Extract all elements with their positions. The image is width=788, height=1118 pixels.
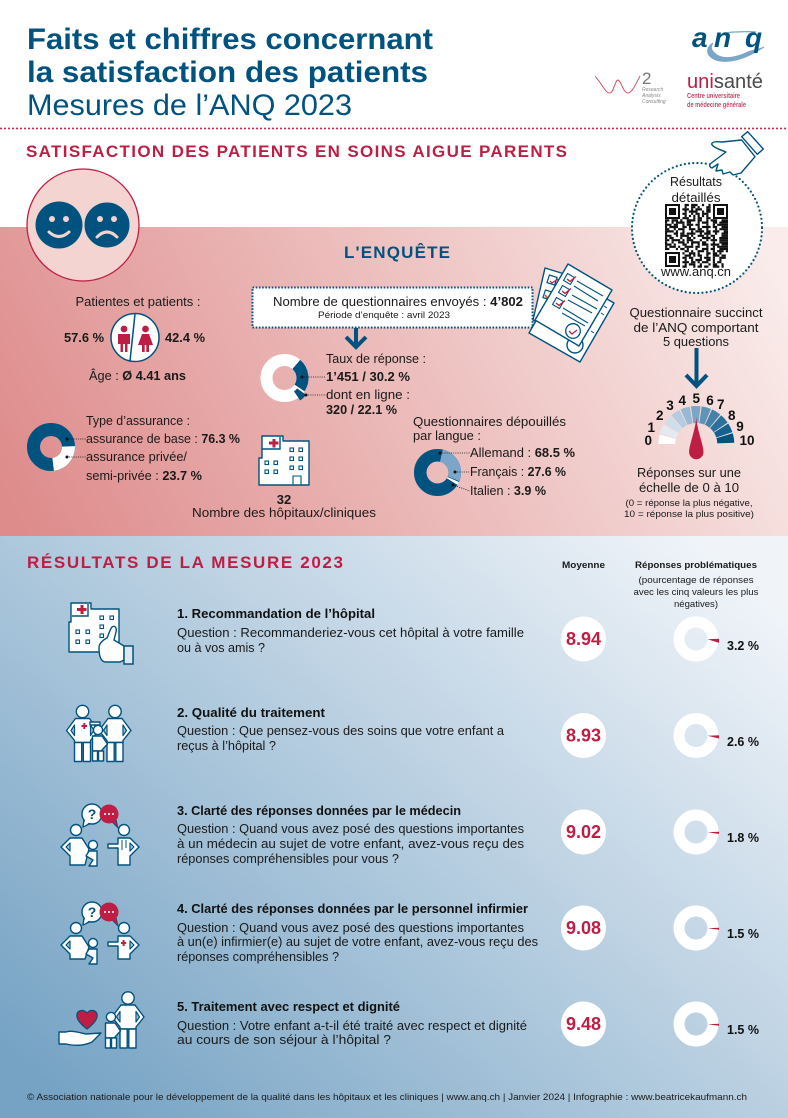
average score xyxy=(561,1002,606,1046)
response rate labels xyxy=(326,351,426,417)
average score: 8.94 xyxy=(566,629,601,649)
column head: average: Moyenne xyxy=(562,560,605,570)
problem share donut: 2.6 % xyxy=(727,735,759,749)
scale caption xyxy=(624,465,754,519)
gauge numbers: 2 xyxy=(656,408,663,423)
gender split: Patientes et patients : xyxy=(75,294,201,309)
gender split: Âge : Ø 4.41 ans xyxy=(89,368,186,383)
logo: W2: Research xyxy=(642,87,664,93)
logo: W2: 2 xyxy=(642,69,651,88)
logo: anq: n xyxy=(714,22,731,53)
gauge numbers: 1 xyxy=(648,420,656,435)
gauge numbers: 9 xyxy=(736,419,744,434)
gender split: 42.4 % xyxy=(165,330,205,345)
gauge numbers: 10 xyxy=(739,433,755,448)
title: la satisfaction des patients xyxy=(27,56,428,89)
gender split: 57.6 % xyxy=(64,330,104,345)
row 3: doctor answers: réponses compréhensibles pour vous ? xyxy=(177,852,399,866)
insurance labels: assurance de base : 76.3 % xyxy=(86,431,240,446)
scale caption: échelle de 0 à 10 xyxy=(639,480,739,495)
background: survey band xyxy=(0,227,788,536)
column head: problematic answers: avec les cinq valeurs les plus xyxy=(634,587,759,597)
logo: anq xyxy=(692,22,764,61)
problem share donut: 1.5 % xyxy=(727,927,759,941)
QR panel: détaillés xyxy=(672,190,721,205)
row 4: nurse answers: réponses compréhensibles ? xyxy=(177,950,339,964)
icon: questionnaire sheets xyxy=(529,264,614,362)
average score: 9.48 xyxy=(566,1014,601,1034)
logo: anq: a xyxy=(692,22,708,53)
insurance labels: assurance privée/ xyxy=(86,449,187,464)
language labels: Allemand : 68.5 % xyxy=(470,445,575,460)
row 3: doctor answers: 3. Clarté des réponses données par le médecin xyxy=(177,804,461,818)
row 4: nurse answers xyxy=(61,902,759,964)
problem share donut: 1.5 % xyxy=(727,1023,759,1037)
language labels: Français : 27.6 % xyxy=(470,464,566,479)
QR panel: www.anq.cn xyxy=(660,264,731,279)
row 3: doctor answers: à un médecin au sujet de votre enfant, avez-vous reçu des xyxy=(177,837,524,851)
chart: response rate donut xyxy=(259,353,326,406)
column head: problematic answers: (pourcentage de réponses xyxy=(638,575,754,585)
row 4: nurse answers: à un(e) infirmier(e) au sujet de votre enfant, avez-vous reçu des xyxy=(177,935,538,949)
row 5: respect and dignity: Question : Votre enfant a-t-il été traité avec respect et dignité xyxy=(177,1019,527,1033)
language labels xyxy=(470,445,575,498)
average score: 9.02 xyxy=(566,822,601,842)
language heading: Questionnaires dépouillés xyxy=(413,414,566,429)
hospitals count: 32 xyxy=(277,492,291,507)
icon: doctor conversation: ? xyxy=(88,806,96,822)
response rate labels: 1’451 / 30.2 % xyxy=(326,369,410,384)
QR panel xyxy=(632,163,762,293)
questionnaire text: Questionnaire succinct xyxy=(630,305,763,320)
problem share donut xyxy=(679,1007,759,1041)
language heading xyxy=(413,414,566,443)
icon: nurse conversation xyxy=(61,902,139,964)
problem share donut xyxy=(679,622,759,656)
problem share donut xyxy=(679,718,759,752)
chart: scale gauge xyxy=(655,402,738,486)
average score xyxy=(561,616,606,662)
questionnaire text: 5 questions xyxy=(663,334,729,349)
column head: problematic answers: Réponses problématiques xyxy=(635,560,757,570)
gauge numbers: 4 xyxy=(679,393,687,408)
hospitals count xyxy=(192,492,377,520)
problem share donut xyxy=(679,815,759,849)
row 3: doctor answers xyxy=(61,804,759,866)
icon: hospital with thumb xyxy=(69,603,133,664)
gender split xyxy=(64,294,205,383)
row 2: treatment quality xyxy=(66,705,759,762)
logo: unisanté: unisanté xyxy=(687,71,763,93)
language labels: Italien : 3.9 % xyxy=(470,483,546,498)
average score xyxy=(561,810,606,854)
response rate labels: Taux de réponse : xyxy=(326,351,426,366)
logo: W2: Analysis xyxy=(641,93,661,99)
gauge needle xyxy=(689,417,704,459)
icon: family and caregiver xyxy=(66,705,131,762)
row 2: treatment quality: Question : Que pensez-vous des soins que votre enfant a xyxy=(177,724,504,738)
questionnaire text xyxy=(630,305,763,349)
row 1: recommendation: 1. Recommandation de l’hôpital xyxy=(177,607,375,621)
heading: satisfaction: SATISFACTION DES PATIENTS EN SOINS AIGUE PARENTS xyxy=(26,142,567,161)
icon: pointing hand xyxy=(710,132,763,175)
column head: problematic answers: négatives) xyxy=(674,599,718,609)
row 1: recommendation: ou à vos amis ? xyxy=(177,641,265,655)
logo: anq: q xyxy=(745,22,762,53)
row 2: treatment quality: 2. Qualité du traitement xyxy=(177,706,326,720)
logo: W2 xyxy=(595,69,666,105)
gauge numbers: 3 xyxy=(666,398,674,413)
icon: nurse conversation: ? xyxy=(88,904,96,920)
title: Mesures de l’ANQ 2023 xyxy=(27,89,352,122)
insurance labels: semi-privée : 23.7 % xyxy=(86,468,202,483)
hospitals count: Nombre des hôpitaux/cliniques xyxy=(192,505,377,520)
logo: unisanté: Centre universitaire xyxy=(687,93,740,100)
logo: W2: Consulting xyxy=(642,99,666,105)
gauge numbers: 6 xyxy=(706,393,714,408)
logo: unisanté xyxy=(687,71,763,109)
icon: smiley faces xyxy=(27,169,139,281)
chart: insurance donut xyxy=(33,429,86,465)
scale caption: 10 = réponse la plus positive) xyxy=(624,509,754,519)
icon: heart in hand with family xyxy=(59,992,144,1048)
language heading: par langue : xyxy=(413,428,481,443)
scale caption: Réponses sur une xyxy=(637,465,741,480)
logo: unisanté: de médecine générale xyxy=(687,102,746,109)
insurance labels xyxy=(86,413,240,483)
problem share donut: 3.2 % xyxy=(727,639,759,653)
heading: survey: L'ENQUÊTE xyxy=(344,243,450,262)
column head: problematic answers xyxy=(634,560,759,609)
icon: doctor conversation xyxy=(61,804,139,866)
row 5: respect and dignity: 5. Traitement avec respect et dignité xyxy=(177,1000,400,1014)
row 1: recommendation xyxy=(69,603,759,664)
gauge numbers: 0 xyxy=(645,433,652,448)
insurance labels: Type d’assurance : xyxy=(86,413,190,428)
box: questionnaires sent: Période d’enquête : avril 2023 xyxy=(318,310,450,320)
row 3: doctor answers: Question : Quand vous avez posé des questions importantes xyxy=(177,822,524,836)
gauge numbers: 5 xyxy=(693,391,701,406)
questionnaire text: de l’ANQ comportant xyxy=(634,320,759,335)
title: Faits et chiffres concernant xyxy=(27,23,433,56)
row 4: nurse answers: 4. Clarté des réponses données par le personnel infirmier xyxy=(177,902,528,916)
icon: hospital xyxy=(259,436,309,485)
row 5: respect and dignity: au cours de son séjour à l’hôpital ? xyxy=(177,1033,391,1047)
average score xyxy=(561,906,606,950)
QR panel: Résultats xyxy=(670,174,722,189)
response rate labels: dont en ligne : xyxy=(326,387,410,402)
arrow: to response rate xyxy=(346,328,366,347)
problem share donut xyxy=(679,911,759,945)
box: questionnaires sent xyxy=(252,288,532,328)
row 2: treatment quality: reçus à l’hôpital ? xyxy=(177,739,276,753)
average score: 8.93 xyxy=(566,726,601,746)
scale caption: (0 = réponse la plus négative, xyxy=(626,498,752,508)
heading: results: RÉSULTATS DE LA MESURE 2023 xyxy=(27,553,343,572)
arrow: to scale xyxy=(686,348,707,386)
chart: language donut xyxy=(415,450,470,495)
title xyxy=(27,23,433,122)
box: questionnaires sent: Nombre de questionnaires envoyés : 4’802 xyxy=(273,294,523,309)
row 4: nurse answers: Question : Quand vous avez posé des questions importantes xyxy=(177,921,524,935)
row 1: recommendation: Question : Recommanderiez-vous cet hôpital à votre famille xyxy=(177,626,524,640)
problem share donut: 1.8 % xyxy=(727,831,759,845)
average score: 9.08 xyxy=(566,918,601,938)
footer: © Association nationale pour le développement de la qualité dans les hôpitaux et les cliniques | www.anq.ch | Janvier 2024 | Infographie : www.beatricekaufmann.ch xyxy=(27,1092,747,1103)
gauge numbers xyxy=(645,391,755,448)
background: results band xyxy=(0,536,788,1118)
response rate labels: 320 / 22.1 % xyxy=(326,402,397,417)
gauge numbers: 7 xyxy=(717,397,724,412)
average score xyxy=(561,713,606,758)
row 5: respect and dignity xyxy=(59,992,759,1048)
gauge numbers: 8 xyxy=(728,408,736,423)
QR code xyxy=(665,205,728,267)
